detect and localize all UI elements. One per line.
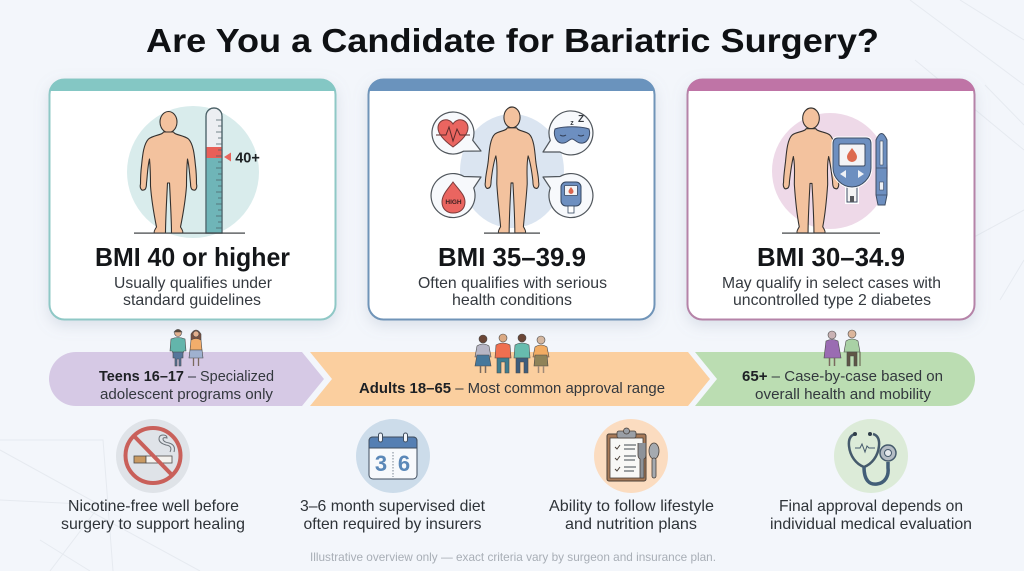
icon: glucose meter bubble [543, 174, 593, 218]
age band: adults [310, 352, 710, 406]
title: Are You a Candidate for Bariatric Surgery? [146, 22, 879, 59]
icon: no smoking [116, 419, 190, 493]
panel: BMI 40 or higher [50, 79, 336, 320]
icon: sleep mask bubble [543, 111, 593, 155]
text block: seniors: overall health and mobility [755, 387, 932, 403]
requirement: nicotine-free [61, 419, 245, 533]
icon: body with health condition bubbles [431, 107, 593, 234]
text block: Often qualifies with serious [418, 275, 607, 292]
text block: Usually qualifies under [114, 275, 273, 292]
text block: Ability to follow lifestyle [549, 498, 714, 515]
icon: high blood pressure drop bubble: HIGH [445, 199, 462, 206]
text block: 3–6 month supervised diet [300, 498, 486, 515]
text block: teens: adolescent programs only [100, 387, 274, 403]
text block: Nicotine-free well before [68, 498, 239, 515]
icon: body with glucose meter and pen [772, 108, 888, 234]
requirement: lifestyle plans [549, 419, 714, 533]
text block [722, 275, 941, 309]
text block: uncontrolled type 2 diabetes [733, 292, 931, 309]
text block: seniors: 65+ – Case-by-case based on [742, 369, 943, 385]
text block [300, 498, 486, 533]
icon: adult figures [475, 334, 549, 373]
text block: Final approval depends on [779, 498, 963, 515]
icon: heart bubble [432, 112, 481, 154]
icon: high blood pressure drop bubble [431, 174, 481, 218]
requirement: supervised diet [300, 419, 486, 533]
icon: senior figures [824, 330, 860, 366]
panel: BMI 30-34.9 [688, 79, 974, 320]
text block: standard guidelines [123, 292, 261, 309]
text block: seniors [742, 369, 943, 403]
icon: teen figures [170, 330, 203, 366]
icon: calendar: 3 [375, 451, 387, 476]
heading: BMI 40 or higher [95, 242, 290, 272]
icon: stethoscope [834, 419, 908, 493]
icon: body with BMI thermometer [127, 106, 260, 238]
text block [61, 498, 245, 533]
text block [418, 275, 607, 309]
footnote: Illustrative overview only — exact criteria vary by surgeon and insurance plan. [310, 550, 716, 564]
icon: sleep mask bubble: Z [578, 114, 584, 125]
text block: adults: Adults 18–65 – Most common approval range [359, 381, 665, 397]
age band: teens [49, 352, 324, 406]
heading: BMI 35–39.9 [438, 242, 586, 272]
heading: BMI 30–34.9 [757, 242, 905, 272]
text block: surgery to support healing [61, 516, 245, 533]
icon: calendar: 6 [398, 451, 410, 476]
requirement: medical evaluation [770, 419, 972, 533]
icon: sleep mask bubble: z [570, 120, 574, 127]
icon: clipboard and cutlery [594, 419, 668, 493]
text block: teens [99, 369, 274, 403]
panel: BMI 35-39.9 [368, 79, 654, 320]
text block: and nutrition plans [565, 516, 697, 533]
text block: May qualify in select cases with [722, 275, 941, 292]
text block [114, 275, 273, 309]
icon: body with BMI thermometer: 40+ [235, 150, 260, 166]
text block [549, 498, 714, 533]
icon: calendar [356, 419, 430, 493]
age band: seniors [695, 352, 975, 406]
text block [770, 498, 972, 533]
text block: often required by insurers [304, 516, 482, 533]
text block: teens: Teens 16–17 – Specialized [99, 369, 274, 385]
text block: individual medical evaluation [770, 516, 972, 533]
text block: health conditions [452, 292, 572, 309]
